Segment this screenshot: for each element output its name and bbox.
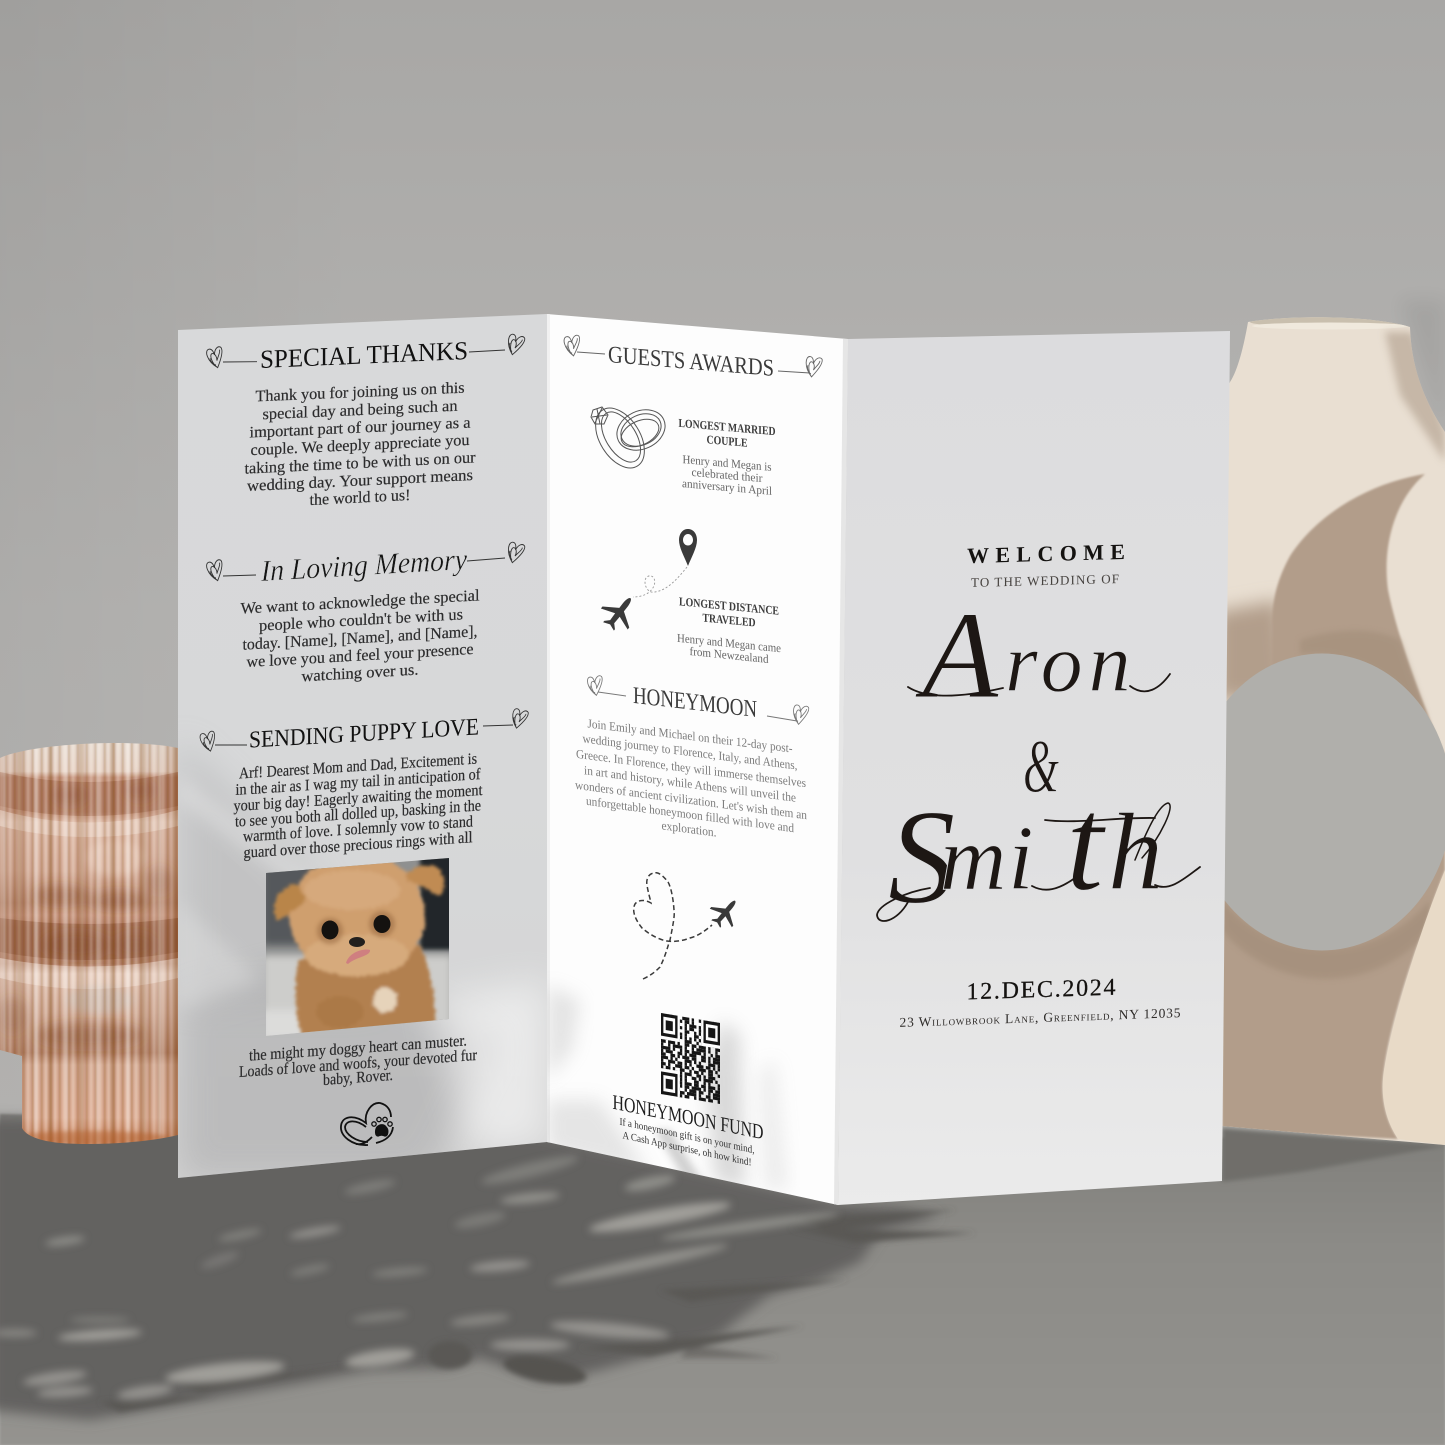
text: thanks message: taking the time to be with us on our <box>245 449 476 478</box>
couple names: A <box>915 587 999 725</box>
text: honeymoon description: in art and history, while Athens will unveil the <box>584 763 796 805</box>
icon: heart flight path with plane <box>634 873 746 979</box>
text: thanks message <box>244 380 476 509</box>
text: longest distance traveled: TRAVELED <box>702 611 756 630</box>
text: longest married couple <box>678 416 776 498</box>
text: longest distance traveled: from Newzealand <box>690 644 768 666</box>
text: longest married couple: Henry and Megan is <box>683 452 772 474</box>
opening in vase <box>1224 654 1445 950</box>
text: address: 23 Willowbrook Lane, Greenfield, NY 12035 <box>899 1005 1181 1030</box>
text: longest married couple: celebrated their <box>692 465 762 485</box>
heading: sending puppy love: SENDING PUPPY LOVE <box>249 714 479 754</box>
text: longest married couple: anniversary in April <box>682 476 773 498</box>
text: honeymoon fund: A Cash App surprise, oh how kind! <box>622 1130 752 1169</box>
text: honeymoon description <box>575 716 808 840</box>
text: letter from the dog: warmth of love. I solemnly vow to stand <box>243 813 473 846</box>
panel: front cover <box>838 331 1230 1205</box>
heading: welcome <box>967 539 1125 590</box>
folded program card <box>178 314 1230 1205</box>
text: thanks message: Thank you for joining us on this <box>256 380 464 405</box>
text: honeymoon fund <box>612 1090 764 1169</box>
couple names: h <box>1108 791 1163 913</box>
heading: honeymoon <box>587 675 809 725</box>
couple names: m <box>940 807 1006 909</box>
text: letter from the dog: guard over those precious rings with all <box>244 829 473 862</box>
text: thanks message: the world to us! <box>310 487 410 509</box>
icon: map pin with route and plane <box>595 529 697 637</box>
text: letter from the dog: your big day! Eagerly awaiting the moment <box>234 782 483 815</box>
couple names: ron <box>1005 617 1137 710</box>
beige sculptural vase <box>1222 317 1445 1145</box>
couple names: i <box>1008 807 1034 909</box>
text: longest distance traveled <box>677 594 781 666</box>
text: honeymoon fund: If a honeymoon gift is on your mind, <box>620 1117 754 1156</box>
panel: middle inside <box>547 314 850 1205</box>
couple names: t <box>1066 770 1107 919</box>
text: thanks message: couple. We deeply appreciate you <box>250 432 470 459</box>
text: date: 12.DEC.2024 <box>966 975 1116 1005</box>
text: honeymoon fund: HONEYMOON FUND <box>612 1090 764 1144</box>
couple names <box>877 587 1200 932</box>
text: memorial message: We want to acknowledge the special <box>240 587 480 618</box>
panel: left inside <box>178 314 547 1180</box>
text: longest married couple: COUPLE <box>707 432 747 450</box>
text: honeymoon description: Greece. In Florence, they will immerse themselves <box>576 747 806 790</box>
text: memorial message: watching over us. <box>302 662 418 685</box>
text: longest married couple: LONGEST MARRIED <box>678 416 776 438</box>
text: thanks message: wedding day. Your support means <box>247 467 473 495</box>
text: longest distance traveled: Henry and Megan came <box>677 631 781 655</box>
text: honeymoon description: exploration. <box>662 818 716 840</box>
icon: heart with paw <box>341 1103 393 1145</box>
text: letter from the dog: to see you both all dolled up, basking in the <box>235 797 481 831</box>
text: letter ending <box>239 1032 478 1089</box>
photo: puppy <box>266 858 449 1036</box>
heading: sending puppy love <box>199 708 529 754</box>
heading: guests awards <box>563 335 823 382</box>
heading: special thanks: SPECIAL THANKS <box>260 336 468 374</box>
heading: guests awards: GUESTS AWARDS <box>608 342 774 382</box>
text: honeymoon description: wonders of ancient civilization. Let's wish them an <box>575 778 808 822</box>
text: letter ending: baby, Rover. <box>323 1067 393 1089</box>
heading: honeymoon: HONEYMOON <box>633 683 757 723</box>
text: letter ending: the might my doggy heart can muster. <box>249 1032 467 1065</box>
heading: in loving memory <box>206 541 525 588</box>
text: letter ending: Loads of love and woofs, your devoted fur <box>239 1047 478 1081</box>
heading: welcome: WELCOME <box>967 539 1125 568</box>
text: letter from the dog: Arf! Dearest Mom and Dad, Excitement is <box>239 751 477 782</box>
text: thanks message: special day and being such an <box>262 398 458 423</box>
ribbed peach glass candle holder <box>0 741 178 1146</box>
text: letter from the dog: in the air as I wag my tail in anticipation of <box>236 766 481 799</box>
text: honeymoon description: unforgettable honeymoon filled with love and <box>586 794 795 835</box>
text: honeymoon description: Join Emily and Michael on their 12-day post- <box>587 716 793 756</box>
background wall <box>0 0 1445 1125</box>
text: memorial message: we love you and feel your presence <box>246 641 474 671</box>
heading: welcome: TO THE WEDDING OF <box>971 571 1119 590</box>
plant shadow on floor <box>0 1118 975 1420</box>
text: letter from the dog <box>234 751 483 862</box>
text: thanks message: important part of our journey as a <box>250 414 470 442</box>
text: longest distance traveled: LONGEST DISTANCE <box>679 594 779 618</box>
couple names: S <box>888 783 956 932</box>
tabletop floor <box>0 1114 1445 1445</box>
text: memorial message: people who couldn't be with us <box>259 606 463 635</box>
icon: wedding rings <box>586 399 672 477</box>
couple names: & <box>1023 725 1059 809</box>
heading: special thanks <box>206 333 525 374</box>
text: honeymoon description: wedding journey to Florence, Italy, and Athens, <box>582 731 798 773</box>
text: memorial message <box>240 587 480 685</box>
heading: in loving memory: In Loving Memory <box>260 543 468 588</box>
text: memorial message: today. [Name], [Name], and [Name], <box>242 623 478 654</box>
QR code <box>661 1013 720 1104</box>
